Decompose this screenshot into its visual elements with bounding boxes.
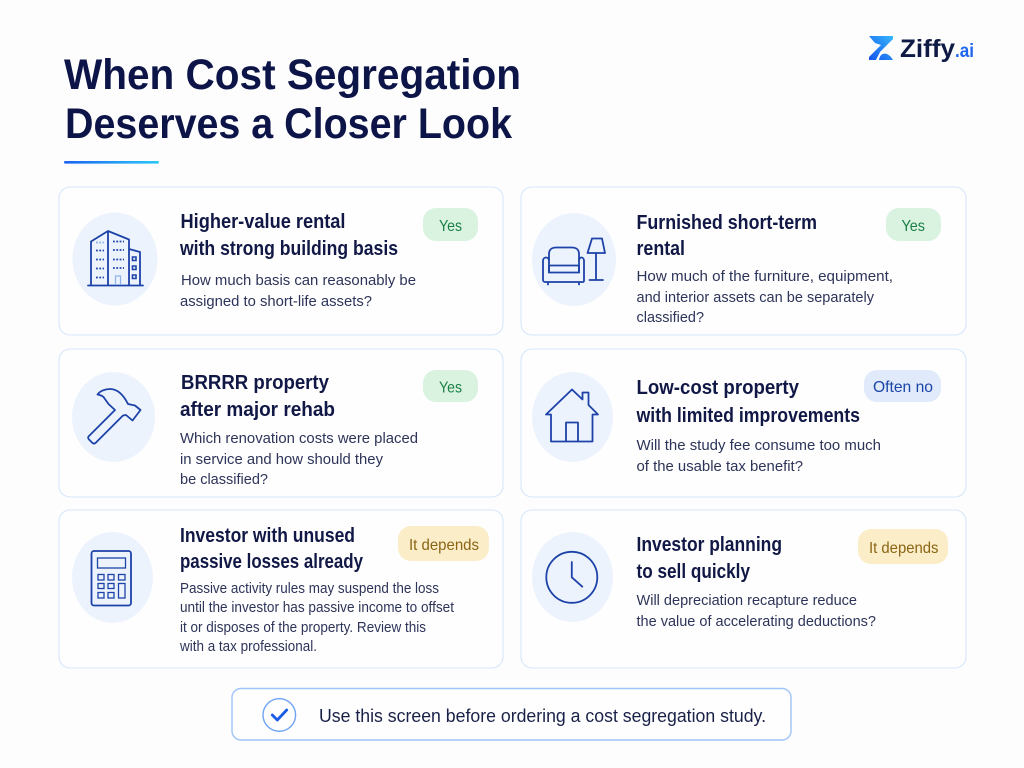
body text: Which renovation costs were placed [180, 431, 418, 447]
body text: be classified? [180, 472, 268, 488]
callout: use this screen [232, 688, 791, 740]
badge: Often no [864, 370, 941, 402]
icon: Z mark [869, 36, 893, 60]
badge: Often no: Often no [873, 379, 933, 396]
badge: It depends: It depends [869, 540, 938, 557]
badge: Yes: Yes [439, 218, 462, 235]
panel: unused passive losses [59, 510, 503, 668]
badge: It depends: It depends [409, 537, 479, 554]
body text [180, 273, 416, 310]
panel: BRRRR property [59, 349, 503, 497]
body text: the value of accelerating deductions? [636, 614, 876, 630]
badge: Yes [886, 208, 941, 241]
body text: of the usable tax benefit? [636, 459, 803, 475]
heading: Furnished short-term [636, 212, 817, 234]
body text: Passive activity rules may suspend the loss [180, 581, 439, 597]
body text: Will depreciation recapture reduce [636, 593, 857, 609]
body text: in service and how should they [180, 452, 384, 468]
title underline [64, 161, 159, 164]
title: Deserves a Closer Look [65, 100, 512, 148]
badge: Yes: Yes [439, 380, 462, 396]
icon: office building [72, 212, 158, 306]
panel: low-cost property [521, 349, 966, 497]
logo suffix: .ai [955, 41, 974, 62]
badge: Yes [423, 370, 478, 402]
body text: until the investor has passive income to offset [180, 600, 454, 616]
body text: assigned to short-life assets? [180, 294, 372, 310]
badge: It depends [858, 529, 948, 564]
heading [180, 525, 364, 573]
body text: Will the study fee consume too much [636, 438, 881, 454]
body text: it or disposes of the property. Review this [180, 620, 426, 636]
heading: Investor planning [636, 534, 782, 556]
title [64, 51, 521, 148]
icon: armchair and lamp [532, 213, 616, 306]
body text [636, 593, 876, 630]
heading [636, 212, 817, 260]
panel: higher-value rental [59, 187, 503, 335]
heading: Low-cost property [636, 377, 800, 399]
body text: and interior assets can be separately [636, 290, 875, 306]
body text: with a tax professional. [179, 639, 317, 655]
heading [180, 372, 335, 421]
heading: with limited improvements [636, 405, 860, 427]
body text: How much of the furniture, equipment, [636, 269, 893, 285]
heading: BRRRR property [181, 372, 330, 394]
callout text: Use this screen before ordering a cost segregation study. [319, 706, 766, 726]
heading: Investor with unused [180, 525, 355, 547]
heading: with strong building basis [179, 238, 398, 260]
badge: Yes: Yes [902, 218, 925, 235]
heading [179, 211, 398, 260]
heading [636, 377, 860, 427]
body text: How much basis can reasonably be [181, 273, 416, 289]
icon: hammer [72, 372, 155, 462]
heading: Higher-value rental [180, 211, 346, 233]
panel: furnished short-term rental [521, 187, 966, 335]
body text [179, 581, 454, 655]
logo: Ziffy.ai [869, 35, 974, 63]
badge: Yes [423, 208, 478, 241]
body text [636, 269, 893, 326]
heading [636, 534, 782, 583]
icon: calculator [72, 532, 153, 623]
heading: rental [636, 238, 685, 260]
body text [180, 431, 418, 488]
logo wordmark: Ziffy [900, 35, 955, 63]
icon: check circle [263, 699, 296, 731]
title: When Cost Segregation [64, 51, 521, 99]
body text [636, 438, 881, 475]
body text: classified? [636, 310, 704, 326]
panel: planning to sell quickly [521, 510, 966, 668]
icon: clock [532, 532, 613, 622]
badge: It depends [398, 526, 489, 561]
heading: after major rehab [180, 399, 335, 421]
heading: passive losses already [180, 551, 364, 573]
icon: house [532, 372, 613, 462]
heading: to sell quickly [636, 561, 751, 583]
